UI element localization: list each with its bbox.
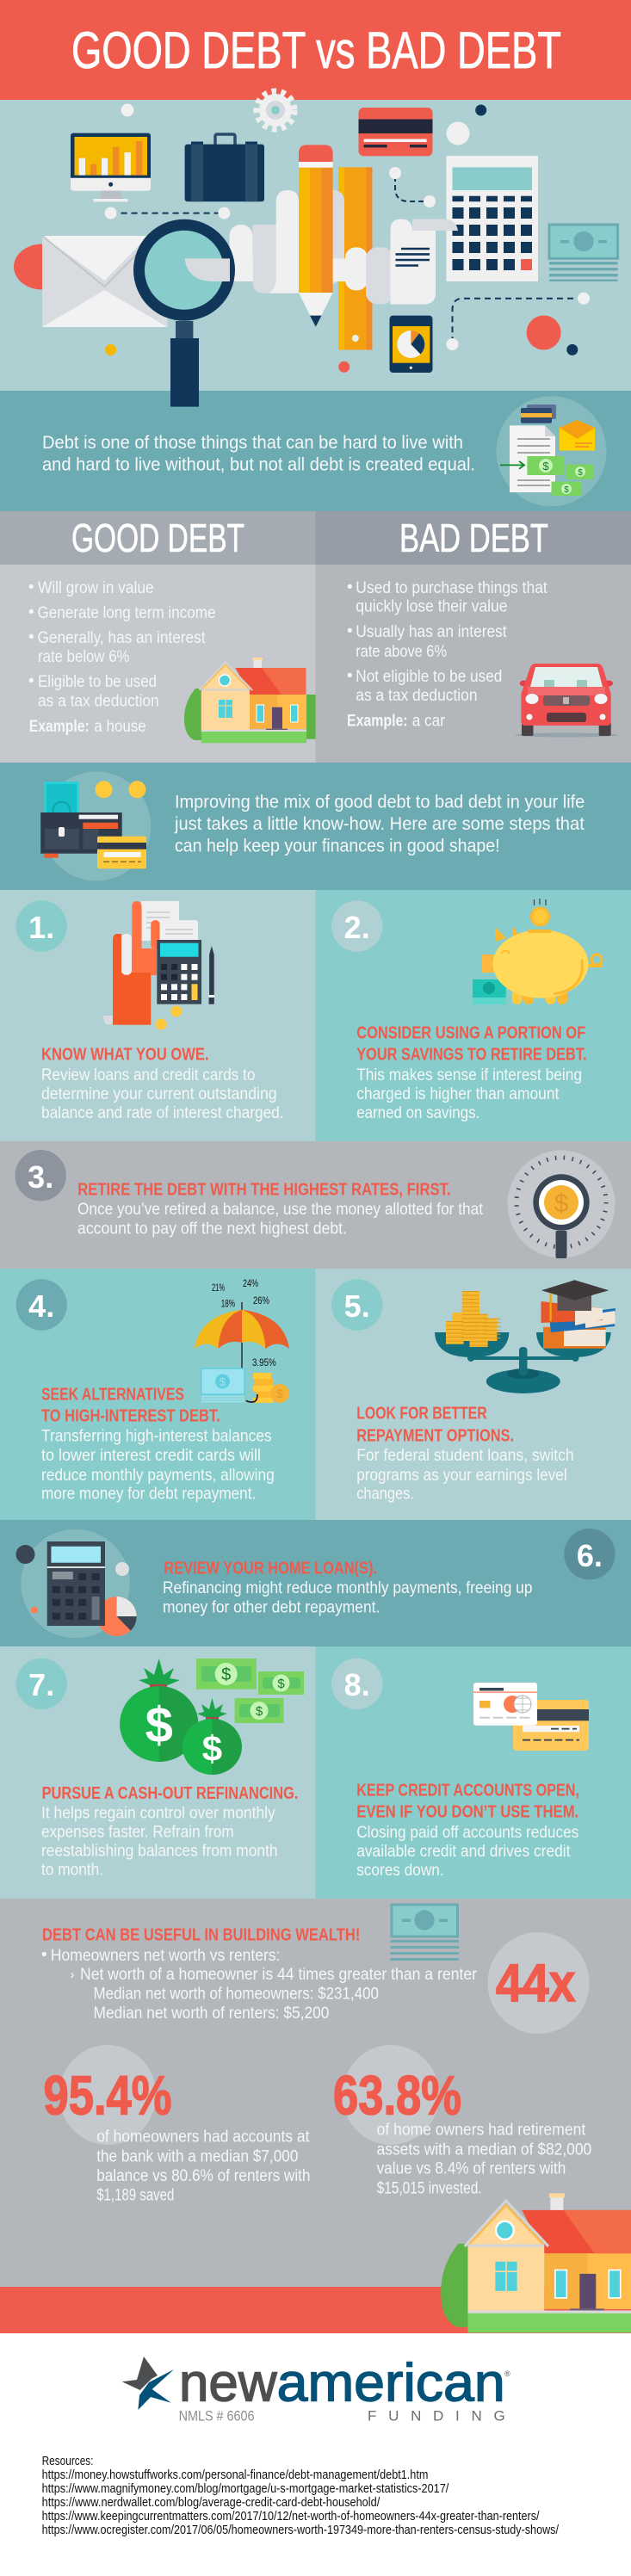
list: good debt: Example: xyxy=(29,718,90,736)
icon: magnifying glass xyxy=(133,219,235,407)
list: bad debt: Usually has an interest xyxy=(356,623,507,641)
list: good debt: • xyxy=(28,603,34,621)
list: bad debt: rate above 6% xyxy=(356,643,447,661)
icon: money bags and bills: $ xyxy=(277,1677,285,1691)
text: consider savings: CONSIDER USING A PORTION OF xyxy=(356,1024,585,1043)
badge: 8 xyxy=(331,1659,382,1709)
heading: bad debt: BAD DEBT xyxy=(399,516,548,560)
text: resources: https://www.keepingcurrentmatters.com/2017/10/12/net-worth-of-homeowners-44x-greater-than-renters/ xyxy=(42,2509,540,2523)
text: consider savings xyxy=(356,1024,587,1122)
icon: money bags and bills: $ xyxy=(202,1728,222,1769)
stat: 63.8%: 63.8% xyxy=(333,2065,461,2127)
icon: large house xyxy=(441,2193,631,2332)
text: debt can be useful: Homeowners net worth vs renters: xyxy=(51,1947,280,1965)
icon: stack of bills xyxy=(549,225,618,281)
panel: intro band xyxy=(0,391,631,511)
intro text: and hard to live without, but not all debt is created equal. xyxy=(42,454,475,475)
icon: magnifier on dollar xyxy=(508,1150,615,1258)
text: debt can be useful: • xyxy=(41,1946,47,1964)
badge: 6 xyxy=(564,1529,616,1579)
text: debt can be useful: › xyxy=(71,1968,74,1982)
icon: red credit card xyxy=(358,108,432,156)
list: good debt: Generally, has an interest xyxy=(38,629,206,647)
panel: step 6 xyxy=(0,1520,631,1646)
text: debt can be useful xyxy=(41,1926,478,2023)
text: keep accounts open: KEEP CREDIT ACCOUNTS OPEN, xyxy=(356,1782,579,1801)
badge: 7: 7. xyxy=(28,1667,54,1702)
badge: 7 xyxy=(15,1659,67,1709)
text: cash-out refinancing: It helps regain control over monthly xyxy=(41,1804,275,1822)
text: know what you owe: balance and rate of interest charged. xyxy=(41,1104,284,1122)
text: debt can be useful: Median net worth of homeowners: $231,400 xyxy=(93,1986,379,2004)
text: consider savings: YOUR SAVINGS TO RETIRE DEBT. xyxy=(356,1046,587,1065)
text: know what you owe: KNOW WHAT YOU OWE. xyxy=(41,1046,209,1065)
panel: step 5 xyxy=(315,1269,631,1520)
stat: 63.8%: value vs 8.4% of renters with xyxy=(377,2160,566,2178)
text: better repayment options: LOOK FOR BETTER xyxy=(356,1405,487,1424)
icon: document with cards and money: $ xyxy=(542,460,549,473)
icon: money bags and bills: $ xyxy=(221,1665,231,1684)
text: improving the mix xyxy=(174,792,585,856)
panel: bad debt xyxy=(315,511,631,763)
text: cash-out refinancing: PURSUE A CASH-OUT REFINANCING. xyxy=(42,1784,298,1803)
icon: red car xyxy=(515,664,618,737)
text: keep accounts open: Closing paid off accounts reduces xyxy=(356,1824,578,1842)
stat: 63.8% xyxy=(333,2045,591,2197)
icon: gear xyxy=(257,91,294,129)
text: keep accounts open xyxy=(356,1782,579,1880)
text: seek alternatives: to lower interest credit cards will xyxy=(41,1447,261,1465)
text: debt can be useful: Net worth of a homeowner is 44 times greater than a renter xyxy=(80,1966,478,1984)
list: good debt: • xyxy=(28,578,34,596)
list: good debt: a house xyxy=(94,718,146,736)
list: good debt: as a tax deduction xyxy=(38,693,159,711)
icon: umbrella with rates: $ xyxy=(220,1375,226,1388)
stat: 95.4%: 95.4% xyxy=(43,2065,172,2127)
list: bad debt: Used to purchase things that xyxy=(356,579,547,597)
text: know what you owe xyxy=(41,1046,284,1122)
icon: house xyxy=(184,658,315,743)
badge: 3 xyxy=(15,1150,66,1201)
text: seek alternatives: SEEK ALTERNATIVES xyxy=(41,1386,184,1405)
text: retire the debt xyxy=(77,1181,484,1239)
stat: 95.4%: $1,189 saved xyxy=(96,2187,174,2205)
icon: wallet with cards xyxy=(40,771,151,881)
text: seek alternatives: more money for debt repayment. xyxy=(41,1486,256,1504)
icon: credit cards xyxy=(473,1683,589,1751)
text: better repayment options: REPAYMENT OPTIONS. xyxy=(356,1426,514,1445)
icon: document with cards and money: $ xyxy=(564,485,569,495)
list: good debt: • xyxy=(28,672,34,690)
icon: document with cards and money: $ xyxy=(578,468,583,478)
icon: receipts and calculator xyxy=(103,901,214,1029)
list: bad debt: • xyxy=(347,578,353,596)
logo: new american funding: new xyxy=(179,2353,277,2412)
panel: step 3 xyxy=(0,1141,631,1269)
title banner xyxy=(0,0,631,100)
text: consider savings: This makes sense if interest being xyxy=(356,1066,582,1084)
text: resources: https://www.magnifymoney.com/blog/mortgage/u-s-mortgage-market-statistics-2017/ xyxy=(42,2481,449,2496)
text: improving the mix: Improving the mix of good debt to bad debt in your life xyxy=(175,792,585,812)
icon: money bags and bills: $ xyxy=(256,1704,263,1719)
logo: new american funding xyxy=(122,2353,510,2425)
list: good debt: rate below 6% xyxy=(38,648,130,666)
icon: umbrella with rates: 24% xyxy=(243,1279,258,1289)
logo: new american funding: NMLS # 6606 xyxy=(179,2408,255,2425)
text: consider savings: charged is higher than amount xyxy=(356,1085,560,1103)
stat: 63.8%: of home owners had retirement xyxy=(377,2122,586,2140)
text: cash-out refinancing: to month. xyxy=(41,1862,103,1880)
intro text: Debt is one of those things that can be hard to live with xyxy=(42,433,463,453)
badge: 1: 1. xyxy=(28,910,54,945)
badge: 2: 2. xyxy=(344,910,370,945)
text: know what you owe: Review loans and credit cards to xyxy=(41,1066,255,1084)
icon: umbrella with rates: 26% xyxy=(253,1296,269,1307)
list: bad debt: Not eligible to be used xyxy=(356,668,502,686)
stat: 63.8%: $15,015 invested. xyxy=(377,2179,482,2197)
list: good debt: Generate long term income xyxy=(38,604,215,622)
panel: step 1 xyxy=(0,890,315,1141)
text: better repayment options: changes. xyxy=(356,1486,414,1504)
text: cash-out refinancing xyxy=(41,1784,298,1880)
panel: hero illustration xyxy=(0,100,631,407)
text: keep accounts open: available credit and drives credit xyxy=(356,1843,571,1861)
icon: umbrella with rates: 3.95% xyxy=(252,1358,276,1368)
text: resources: https://money.howstuffworks.com/personal-finance/debt-management/debt1.htm xyxy=(42,2468,428,2482)
text: better repayment options: For federal student loans, switch xyxy=(356,1447,574,1465)
icon: money bags and bills: $ xyxy=(145,1697,173,1753)
text: keep accounts open: scores down. xyxy=(356,1862,444,1880)
text: consider savings: earned on savings. xyxy=(356,1104,479,1122)
logo: new american funding: FUNDING xyxy=(368,2408,505,2425)
icon: calculator xyxy=(412,156,538,281)
text: seek alternatives: reduce monthly payments, allowing xyxy=(41,1467,275,1485)
badge: 2 xyxy=(331,900,382,952)
list: good debt: Eligible to be used xyxy=(38,673,157,691)
text: seek alternatives: Transferring high-interest balances xyxy=(41,1428,272,1446)
list: good debt: Will grow in value xyxy=(38,579,154,597)
list: bad debt: • xyxy=(347,667,353,685)
list: bad debt: Example: xyxy=(347,712,408,730)
logo: new american funding: american xyxy=(277,2353,505,2412)
panel: step 8 xyxy=(315,1646,631,1899)
icon: paper scroll xyxy=(207,190,436,305)
badge: 3: 3. xyxy=(28,1159,53,1195)
stat: 44x: 44x xyxy=(496,1954,576,2013)
icon: phone with pie chart xyxy=(389,316,432,373)
text: cash-out refinancing: reestablishing balances from month xyxy=(41,1843,278,1861)
text: cash-out refinancing: expenses faster. Refrain from xyxy=(41,1824,234,1842)
list: bad debt: a car xyxy=(412,712,446,730)
panel: step 2 xyxy=(315,890,631,1141)
icon: pencil xyxy=(299,145,333,327)
icon: piggy bank xyxy=(473,899,603,1004)
icon: envelope xyxy=(14,236,167,327)
text: better repayment options xyxy=(356,1405,574,1504)
text: review your home loans: money for other debt repayment. xyxy=(163,1599,380,1617)
list: bad debt: as a tax deduction xyxy=(356,687,477,705)
icon: monitor with bar chart xyxy=(71,133,151,201)
stat: 63.8%: assets with a median of $82,000 xyxy=(377,2140,591,2159)
stat: 95.4%: the bank with a median $7,000 xyxy=(96,2148,298,2166)
text: know what you owe: determine your current outstanding xyxy=(41,1085,277,1103)
icon: umbrella with rates: $ xyxy=(276,1387,283,1400)
icon: magnifier on dollar: $ xyxy=(554,1189,569,1218)
stat: 44x xyxy=(487,1932,589,2034)
icon: umbrella with rates: 21% xyxy=(212,1283,225,1294)
panel: step 4 xyxy=(0,1269,315,1520)
logo star xyxy=(122,2357,174,2410)
logo: new american funding: ® xyxy=(504,2369,510,2378)
text: seek alternatives xyxy=(41,1386,275,1504)
icon: ruler xyxy=(338,167,372,349)
text: retire the debt: RETIRE THE DEBT WITH THE HIGHEST RATES, FIRST. xyxy=(77,1181,451,1200)
icon: balance scale with coins and books xyxy=(435,1280,616,1393)
heading: good debt: GOOD DEBT xyxy=(71,516,244,560)
text: retire the debt: account to pay off the next highest debt. xyxy=(77,1220,347,1239)
stat: 95.4%: balance vs 80.6% of renters with xyxy=(96,2167,310,2185)
icon: calculator with pie chart xyxy=(15,1529,137,1638)
text: review your home loans xyxy=(163,1560,532,1617)
text: review your home loans: Refinancing might reduce monthly payments, freeing up xyxy=(163,1579,532,1597)
panel: improving the mix band xyxy=(0,763,631,890)
magnifier handle over band xyxy=(170,391,199,407)
panel: wealth section xyxy=(0,1899,631,2287)
list: good debt xyxy=(28,578,215,736)
text: seek alternatives: TO HIGH-INTEREST DEBT. xyxy=(41,1407,220,1426)
list: bad debt: quickly lose their value xyxy=(356,598,508,616)
text: resources: Resources: xyxy=(42,2454,93,2468)
panel: good debt xyxy=(0,511,315,763)
badge: 5 xyxy=(331,1279,382,1331)
text: retire the debt: Once you’ve retired a balance, use the money allotted for that xyxy=(77,1201,484,1219)
badge: 1 xyxy=(15,900,67,952)
text: improving the mix: just takes a little know-how. Here are some steps that xyxy=(174,814,585,834)
text: better repayment options: programs as your earnings level xyxy=(356,1467,567,1485)
text: debt can be useful: Median net worth of renters: $5,200 xyxy=(93,2005,329,2023)
text: review your home loans: REVIEW YOUR HOME LOAN(S). xyxy=(164,1560,377,1578)
intro text xyxy=(42,433,475,475)
badge: 6: 6. xyxy=(577,1538,603,1573)
list: good debt: • xyxy=(28,628,34,646)
text: keep accounts open: EVEN IF YOU DON’T USE THEM. xyxy=(356,1803,578,1822)
panel: step 7 xyxy=(0,1646,315,1899)
icon: umbrella with rates: 18% xyxy=(221,1300,235,1310)
stat: 95.4% xyxy=(43,2045,310,2205)
stat: 95.4%: of homeowners had accounts at xyxy=(96,2128,310,2147)
list: bad debt xyxy=(347,578,547,730)
text: resources xyxy=(42,2454,560,2537)
icon: briefcase xyxy=(185,134,264,201)
text: improving the mix: can help keep your finances in good shape! xyxy=(175,836,500,856)
text: debt can be useful: DEBT CAN BE USEFUL IN BUILDING WEALTH! xyxy=(42,1926,360,1945)
red footer band xyxy=(0,2287,631,2333)
list: bad debt: • xyxy=(347,622,353,640)
badge: 8: 8. xyxy=(344,1667,370,1702)
badge: 5: 5. xyxy=(344,1288,370,1324)
badge: 4: 4. xyxy=(28,1288,54,1324)
icon: bills stack xyxy=(391,1905,459,1961)
decorative dots xyxy=(105,103,590,373)
icon: umbrella with rates xyxy=(195,1279,289,1403)
text: resources: https://www.nerdwallet.com/blog/average-credit-card-debt-household/ xyxy=(42,2495,380,2510)
icon: document with cards and money xyxy=(496,396,606,506)
icon: money bags and bills xyxy=(120,1659,304,1775)
badge: 4 xyxy=(15,1279,67,1331)
